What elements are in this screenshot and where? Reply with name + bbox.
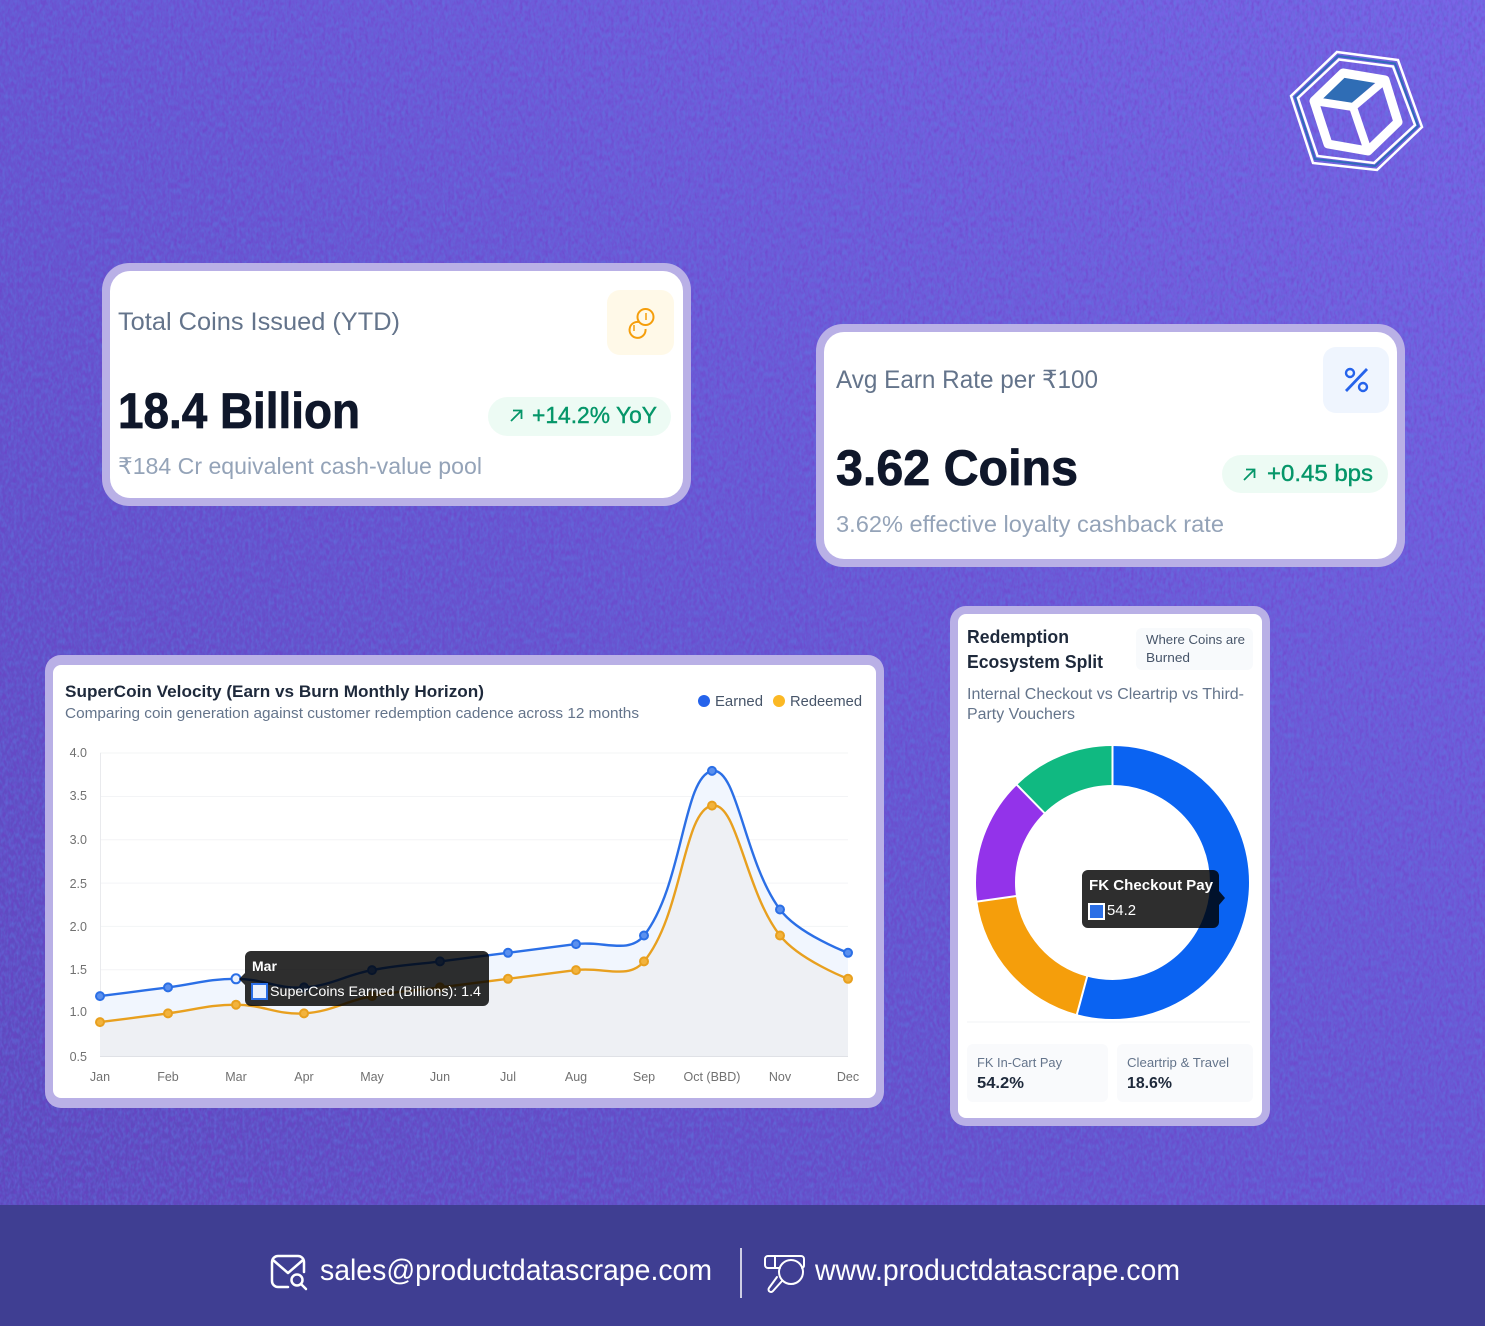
tag: where coins are burned: Where Coins are	[1146, 632, 1245, 647]
x axis labels: May	[360, 1070, 385, 1084]
footer bar	[0, 1205, 1485, 1326]
panel: coin velocity chart	[45, 655, 884, 1108]
stat: FK In-Cart Pay	[967, 1044, 1108, 1102]
logo: hexagon cube	[1291, 52, 1422, 170]
trend pill: YoY: +14.2% YoY	[532, 402, 657, 428]
y axis labels: 1.0	[70, 1005, 87, 1019]
stat: FK In-Cart Pay: 54.2%	[977, 1075, 1024, 1092]
footer email: sales@productdatascrape.com	[320, 1254, 712, 1287]
icon: coins	[607, 290, 674, 355]
y axis labels: 2.5	[70, 877, 87, 891]
KPI label: total coins: Total Coins Issued (YTD)	[118, 308, 400, 336]
x axis labels	[90, 1070, 859, 1084]
chart title: SuperCoin Velocity (Earn vs Burn Monthly Horizon)	[65, 682, 484, 701]
donut chart	[977, 745, 1230, 1015]
line: earned	[96, 767, 852, 1000]
icon: web search	[765, 1256, 804, 1292]
line: redeemed	[96, 802, 852, 1026]
x axis labels: Dec	[837, 1070, 859, 1084]
chart subtitle: Comparing coin generation against customer redemption cadence across 12 months	[65, 706, 639, 722]
x axis labels: Sep	[633, 1070, 655, 1084]
x axis labels: Apr	[294, 1070, 314, 1084]
tag: where coins are burned	[1136, 628, 1253, 670]
panel heading: Ecosystem Split	[967, 652, 1103, 672]
icon: mail search	[272, 1256, 306, 1289]
stat: Cleartrip and Travel	[1117, 1044, 1253, 1102]
x axis labels: Oct (BBD)	[684, 1070, 740, 1084]
KPI label: earn rate: Avg Earn Rate per ₹100	[836, 366, 1098, 394]
tooltip: March: SuperCoins Earned (Billions): 1.4	[270, 983, 481, 999]
y axis labels: 0.5	[70, 1050, 87, 1064]
x axis labels: Aug	[565, 1070, 587, 1084]
panel subtitle: Party Vouchers	[967, 706, 1075, 723]
panel subtitle: Internal Checkout vs Cleartrip vs Third-	[967, 686, 1244, 703]
y axis labels: 3.5	[70, 789, 87, 803]
legend: Earned	[715, 694, 763, 710]
tooltip: FK Checkout Pay: FK Checkout Pay	[1089, 877, 1214, 894]
legend	[698, 694, 862, 710]
panel: redemption split	[950, 606, 1270, 1126]
KPI note: cash value: ₹184 Cr equivalent cash-value pool	[118, 453, 482, 479]
x axis labels: Feb	[157, 1070, 179, 1084]
x axis labels: Jan	[90, 1070, 110, 1084]
panel: total coins issued	[102, 263, 691, 506]
y axis labels	[70, 746, 87, 1064]
tag: where coins are burned: Burned	[1146, 650, 1190, 665]
footer website: www.productdatascrape.com	[814, 1254, 1180, 1287]
tooltip: FK Checkout Pay	[1082, 870, 1225, 928]
panel subtitle	[967, 686, 1244, 723]
x axis labels: Mar	[225, 1070, 247, 1084]
panel: avg earn rate	[816, 324, 1405, 567]
trend pill: bps: +0.45 bps	[1267, 460, 1373, 486]
icon: percent	[1323, 347, 1389, 413]
x axis labels: Jun	[430, 1070, 450, 1084]
y axis labels: 3.0	[70, 833, 87, 847]
KPI value: 18.4 Billion: 18.4 Billion	[118, 383, 360, 439]
trend pill: YoY	[488, 397, 671, 436]
KPI value: 3.62 Coins: 3.62 Coins	[836, 440, 1078, 496]
panel heading: Redemption	[967, 627, 1069, 647]
panel heading	[967, 627, 1103, 672]
area: redeemed	[100, 805, 848, 1056]
stat: Cleartrip and Travel: 18.6%	[1127, 1075, 1172, 1092]
y axis labels: 2.0	[70, 920, 87, 934]
x axis labels: Jul	[500, 1070, 516, 1084]
area: earned	[100, 771, 848, 1056]
KPI note: cashback: 3.62% effective loyalty cashback rate	[836, 511, 1224, 537]
y axis labels: 4.0	[70, 746, 87, 760]
stat: Cleartrip and Travel: Cleartrip & Travel	[1127, 1055, 1229, 1070]
x axis labels: Nov	[769, 1070, 792, 1084]
line chart	[70, 746, 859, 1084]
tooltip: March: Mar	[252, 958, 277, 974]
legend: Redeemed	[790, 694, 862, 710]
y axis labels: 1.5	[70, 963, 87, 977]
trend pill: bps	[1222, 455, 1388, 493]
tooltip: March	[239, 951, 489, 1006]
tooltip: FK Checkout Pay: 54.2	[1107, 902, 1136, 919]
stat: FK In-Cart Pay: FK In-Cart Pay	[977, 1055, 1062, 1070]
